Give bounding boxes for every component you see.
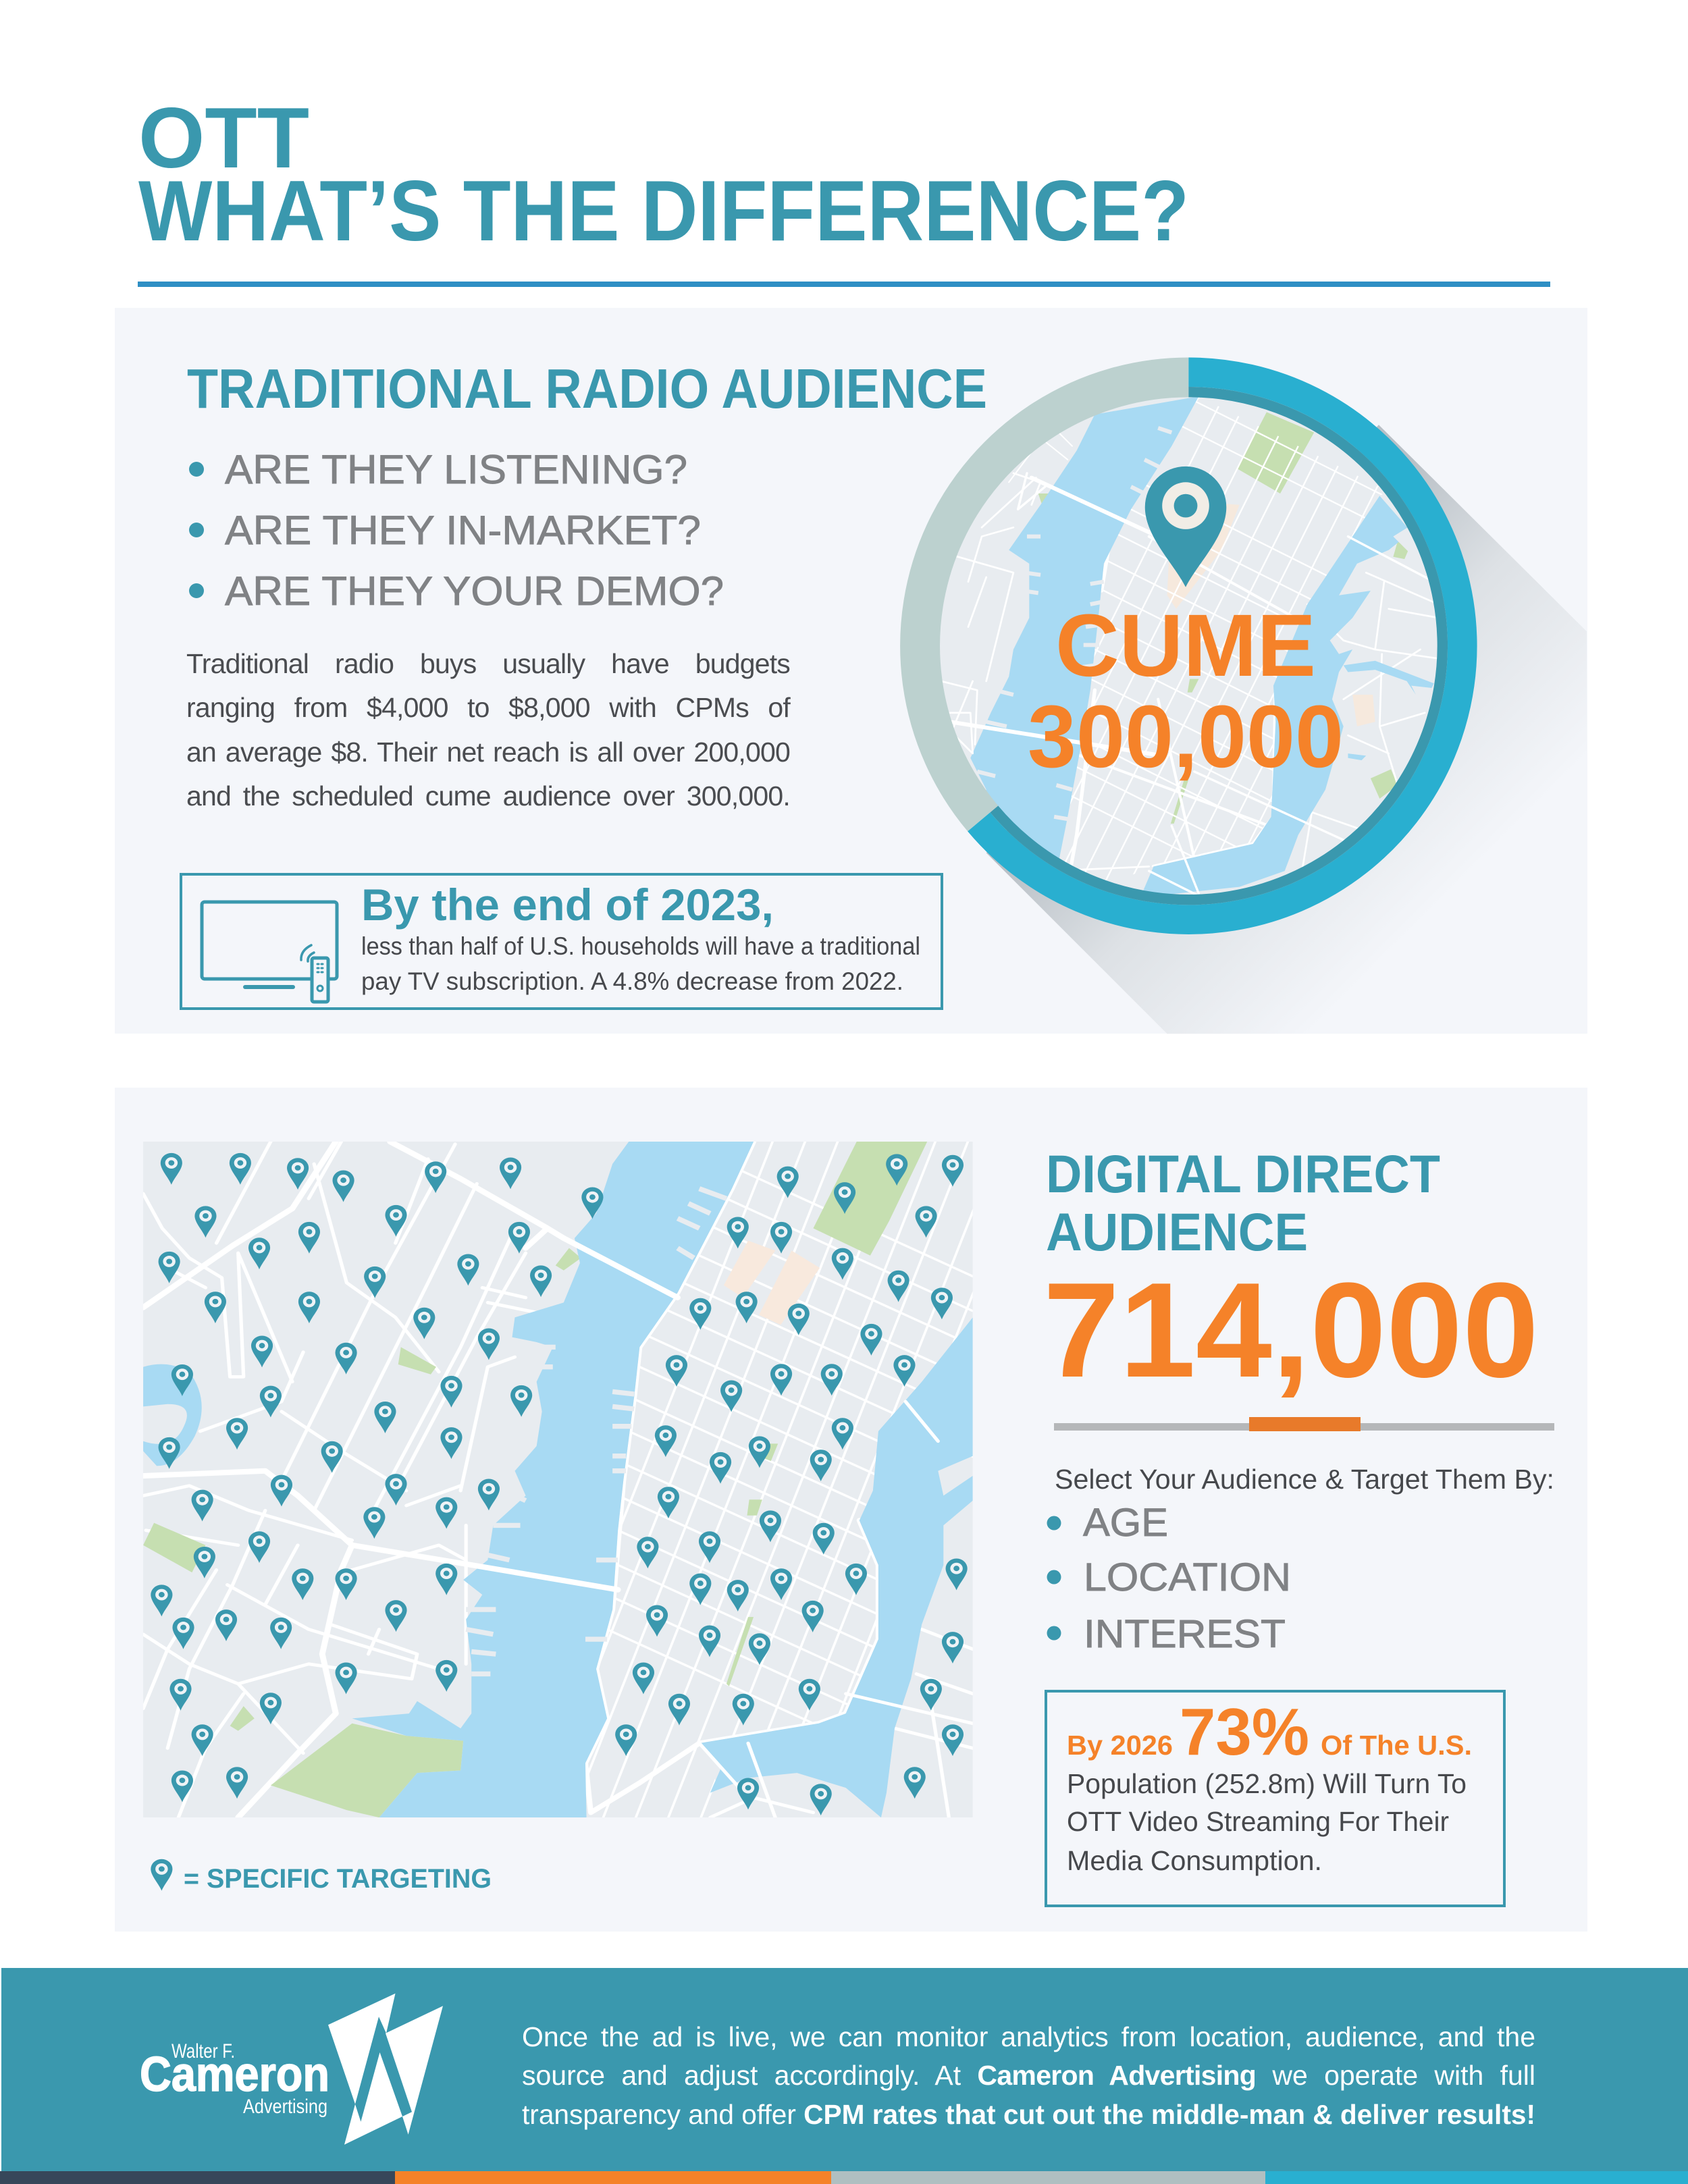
body text: traditional radio buys: ranging from $4,000 to $8,000 with CPMs of [186,692,790,723]
callout: pay TV decline: pay TV subscription. A 4.8% decrease from 2022. [361,967,903,995]
long shadow [986,425,1587,1034]
question list [189,447,724,614]
callout: pay TV decline: less than half of U.S. households will have a traditional [361,932,920,960]
heading: digital direct audience: DIGITAL DIRECT [1046,1144,1440,1204]
roads: manhattan grid [585,1142,972,1817]
title [138,90,1189,259]
question list: ARE THEY IN-MARKET? [225,508,701,553]
logo: Cameron [140,2048,329,2102]
cume figure: 300,000 [1028,687,1344,786]
water [352,1142,754,1817]
question list: ARE THEY YOUR DEMO? [225,568,724,614]
left shore roads [941,473,1040,745]
icon: television and remote [202,902,337,1002]
title: OTT [138,90,309,186]
bridges [950,478,1163,755]
ring: grey segment [920,377,1188,818]
legend pin [151,1859,172,1891]
heading: traditional radio audience: TRADITIONAL RADIO AUDIENCE [187,357,987,420]
ring: blue segment [979,372,1462,920]
audience figure: 714,000 [1043,1255,1539,1406]
icon: map pin [1145,467,1226,587]
targeting list: INTEREST [1084,1612,1286,1656]
footer text: Once the ad is live, we can monitor analytics from location, audience, and the [522,2021,1535,2052]
body text: traditional radio buys: an average $8. Their net reach is all over 200,000 [186,737,790,768]
targeting list [1047,1501,1291,1656]
title: WHAT’S THE DIFFERENCE? [138,163,1189,259]
callout: streaming forecast [1046,1691,1504,1906]
logo [140,1994,443,2145]
callout: pay TV decline [181,874,942,1009]
cume figure [1028,595,1344,786]
callout: streaming forecast: Of The U.S. [1321,1730,1472,1761]
heading: digital direct audience: AUDIENCE [1046,1202,1308,1262]
divider [1054,1417,1554,1431]
pins [151,1153,968,1815]
circular map [940,397,1437,895]
water [968,396,1198,898]
cume circle with map [920,372,1587,1034]
callout: streaming forecast: Media Consumption. [1067,1845,1322,1876]
heading: digital direct audience [1046,1144,1440,1262]
callout: streaming forecast: 73% [1180,1695,1309,1769]
panel: digital direct audience [115,1088,1587,1932]
colour stripe [0,2171,1688,2184]
bridges [471,1238,678,1590]
piers [977,428,1171,819]
targeting intro: Select Your Audience & Target Them By: [1055,1464,1554,1495]
targeting list: AGE [1083,1501,1168,1545]
callout: streaming forecast: By 2026 [1067,1730,1173,1761]
callout: pay TV decline: By the end of 2023, [361,880,774,930]
body text: traditional radio buys [186,648,791,811]
peach blocks [724,1241,775,1298]
cume figure: CUME [1055,595,1316,695]
panel: traditional radio audience [115,308,1587,1034]
footer text [522,2021,1535,2091]
question list: ARE THEY LISTENING? [225,447,687,492]
footer band [1,1968,1688,2171]
body text: traditional radio buys: Traditional radio buys usually have budgets [186,648,790,679]
legend label: = SPECIFIC TARGETING [184,1864,492,1894]
callout: streaming forecast: Population (252.8m) Will Turn To [1067,1768,1467,1799]
right shore roads [1302,572,1438,866]
callout: streaming forecast: OTT Video Streaming For Their [1067,1806,1449,1837]
body text: traditional radio buys: and the scheduled cume audience over 300,000. [186,780,790,811]
footer text: source and adjust accordingly. At Cameron Advertising we operate with full [522,2060,1535,2091]
roads: east side [708,1456,972,1817]
piers [466,1189,727,1674]
targeting map [143,1100,1065,1891]
logo: Advertising [243,2096,327,2118]
land left of map edge detail [1008,433,1073,483]
parks [813,1142,927,1256]
roads: west bank [143,1142,537,1817]
logo: Walter F. [172,2040,235,2062]
targeting list: LOCATION [1084,1555,1291,1599]
footer text last line: transparency and offer CPM rates that cut out the middle-man & deliver results! [522,2099,1535,2130]
